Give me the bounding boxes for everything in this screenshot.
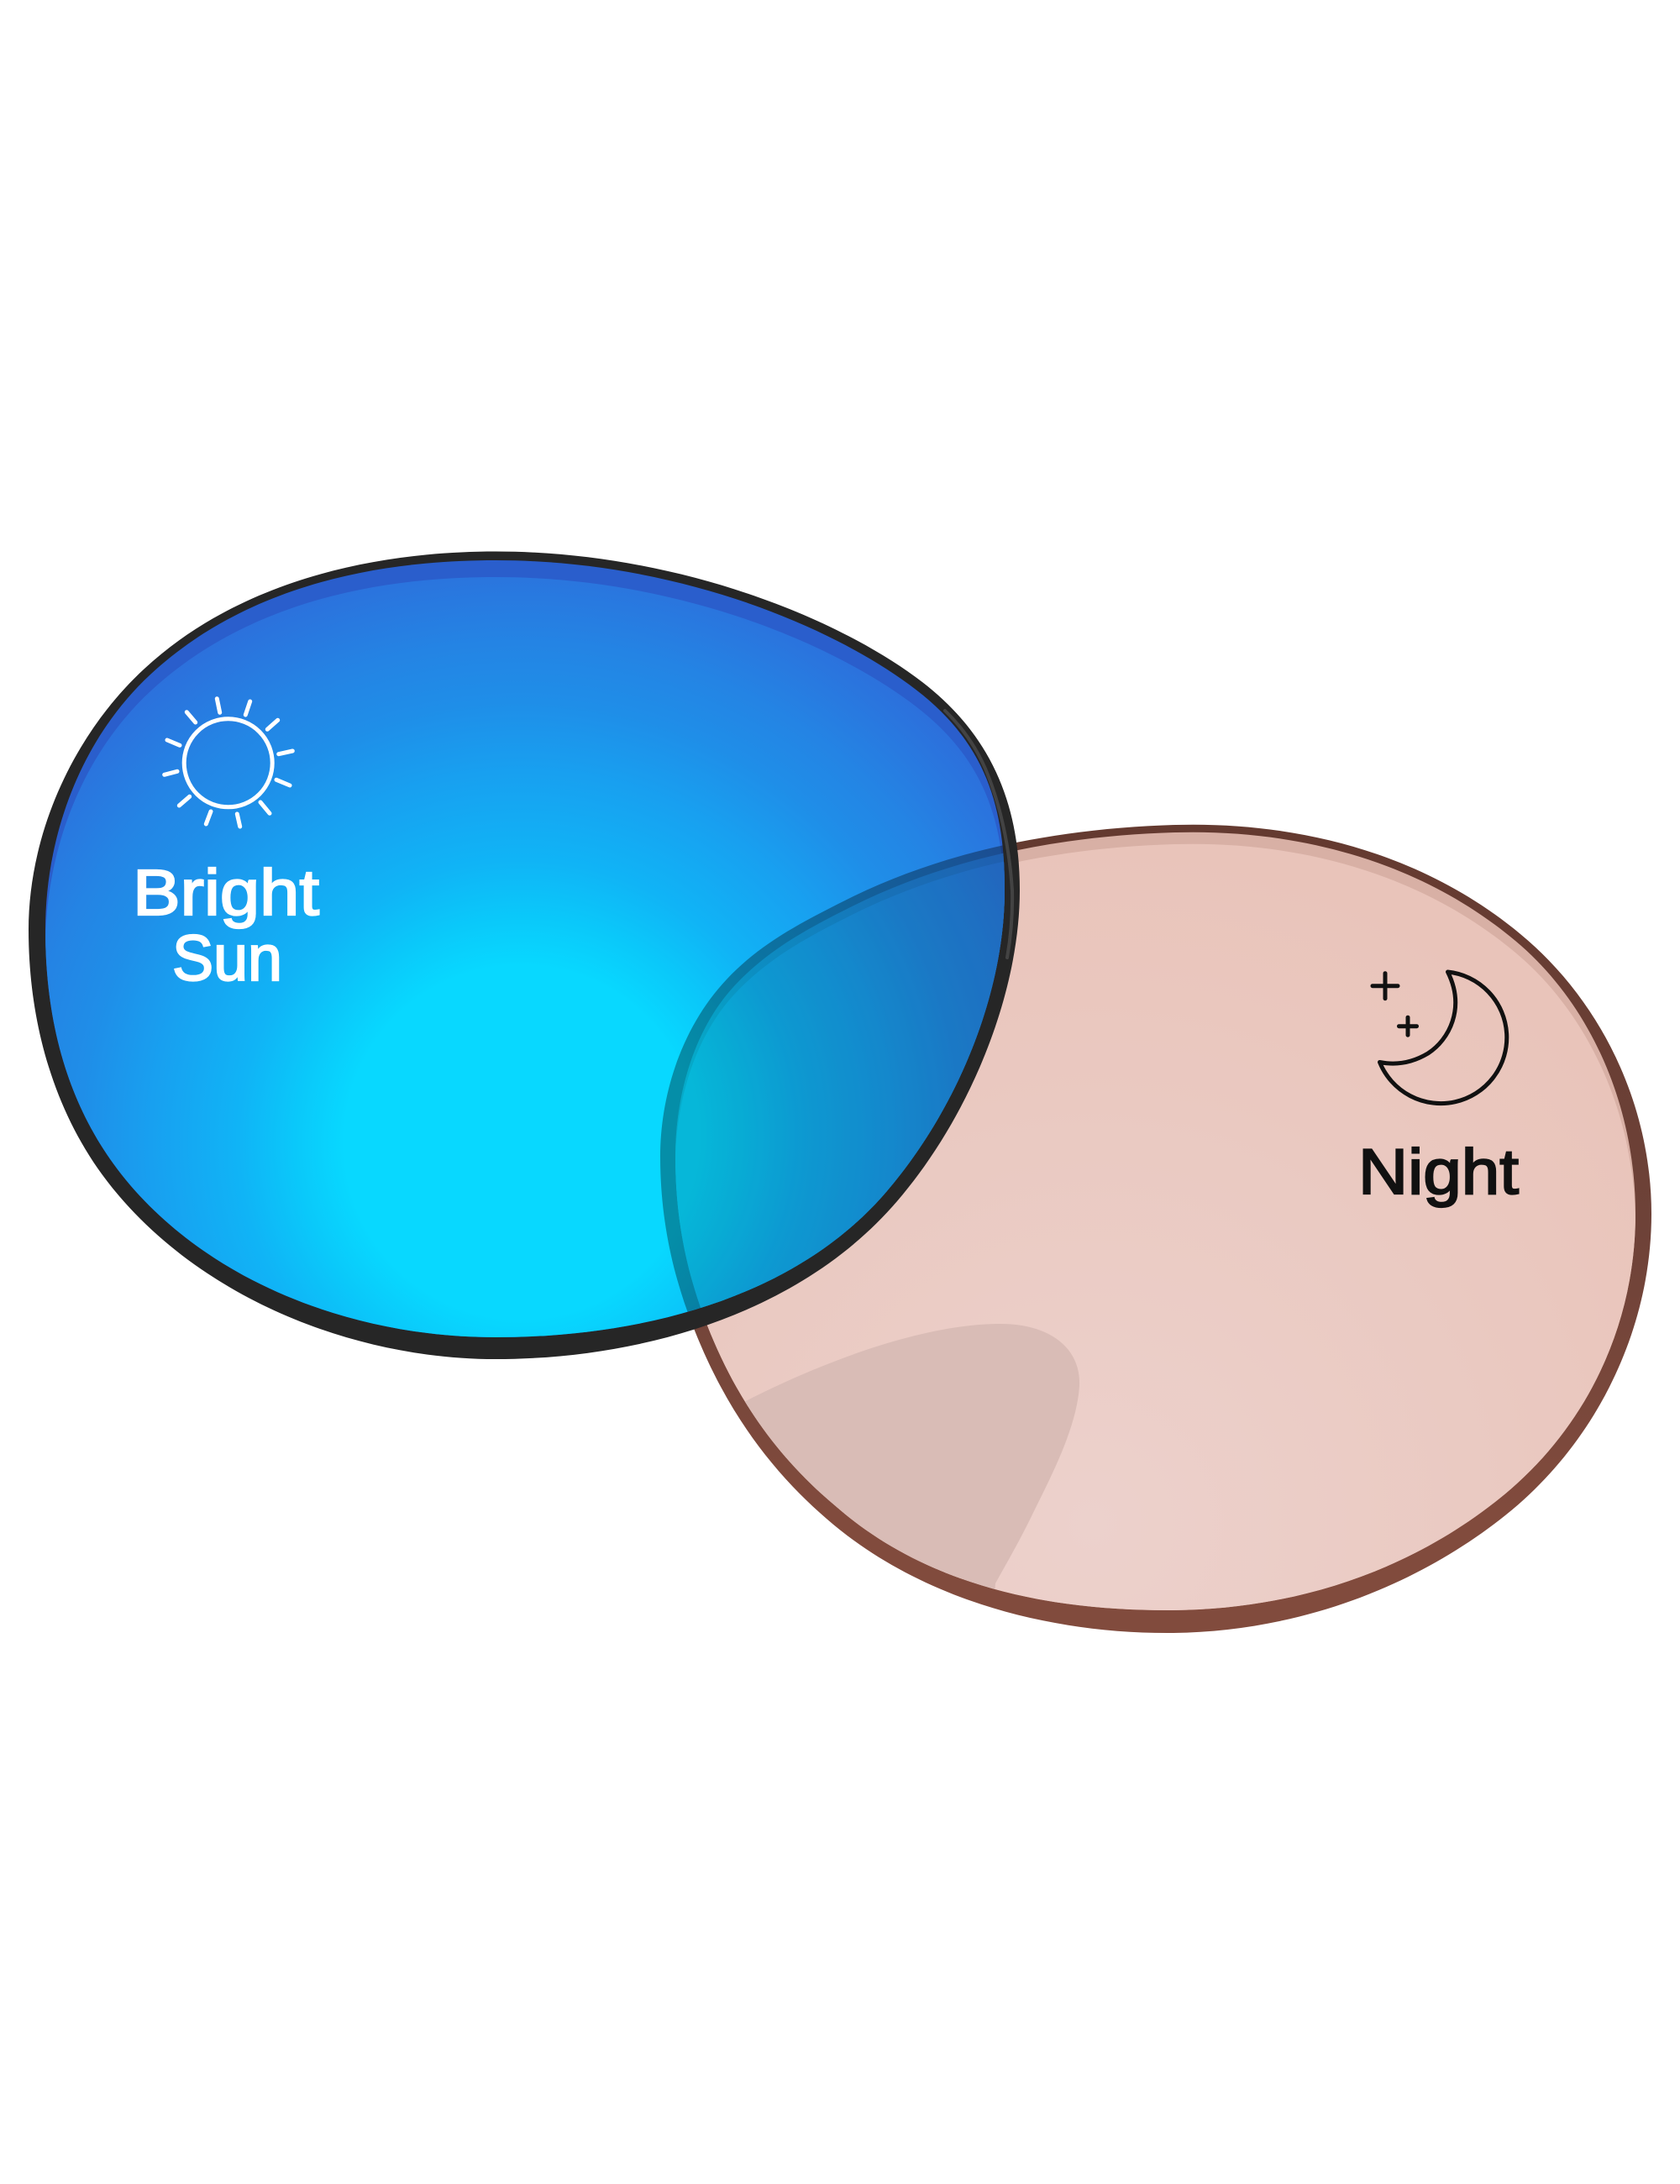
- label: night: Night: [1358, 1137, 1519, 1208]
- night lens tint: [707, 832, 1635, 1610]
- icon: moon and stars: [1373, 972, 1507, 1104]
- panel: bright sun lens: [17, 538, 1033, 1378]
- icon: sun: [165, 699, 292, 827]
- bright sun lens tint: [45, 560, 1005, 1337]
- rim highlight: [945, 711, 1012, 958]
- lens overlap: [660, 845, 1005, 1312]
- label: bright sun: [133, 857, 319, 995]
- reading segment: [745, 1324, 1079, 1589]
- label: bright sun: Bright: [133, 857, 319, 929]
- label: bright sun: Sun: [172, 922, 282, 995]
- panel: night lens: [694, 825, 1651, 1633]
- bright sun lens rim: [29, 551, 1020, 1359]
- night lens rim: [660, 825, 1651, 1633]
